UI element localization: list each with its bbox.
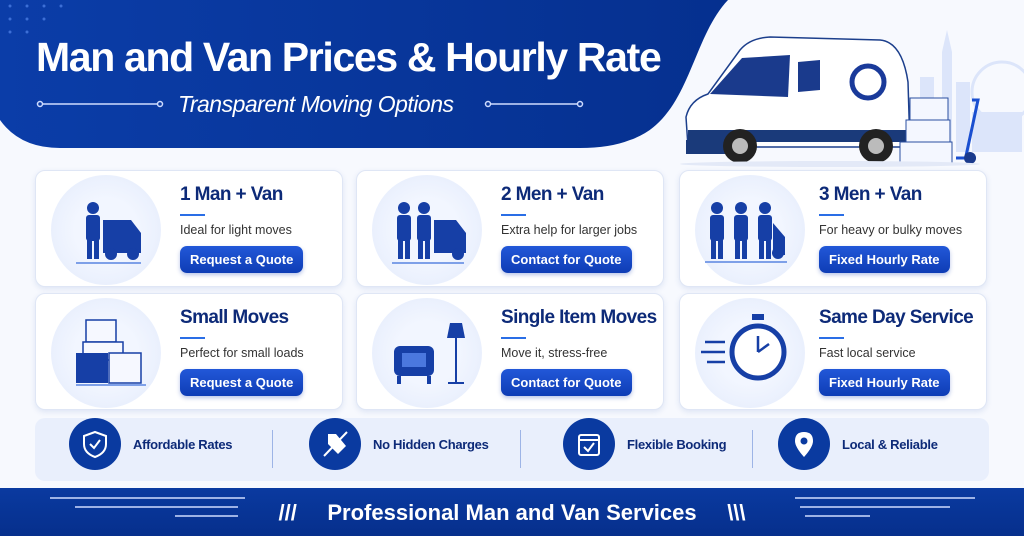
card: Single Item Moves: Single Item Moves	[501, 307, 657, 328]
card: Same Day Service: Same Day Service	[819, 307, 973, 328]
card: Single Item Moves: Move it, stress-free	[501, 346, 607, 360]
card: 1 Man + Van	[35, 170, 343, 287]
card: Small Moves	[35, 293, 343, 410]
feature: No Hidden Charges: No Hidden Charges	[373, 436, 489, 452]
card: Same Day Service: Fast local service	[819, 346, 916, 360]
subtitle: Transparent Moving Options	[178, 91, 454, 117]
header banner	[0, 0, 728, 148]
card: Same Day Service: Fixed Hourly Rate	[829, 375, 940, 390]
card: 3 Men + Van	[679, 170, 987, 287]
card: 3 Men + Van: Fixed Hourly Rate	[829, 252, 940, 267]
feature: Local & Reliable: Local & Reliable	[842, 436, 938, 452]
feature: No Hidden Charges	[309, 418, 489, 470]
card: 1 Man + Van: 1 Man + Van	[180, 184, 283, 205]
card: 2 Men + Van	[356, 170, 664, 287]
feature: Local & Reliable	[778, 418, 938, 470]
card: Single Item Moves	[356, 293, 664, 410]
card: Small Moves: Perfect for small loads	[180, 346, 304, 360]
card: Small Moves: Request a Quote	[190, 375, 293, 390]
footer banner	[0, 488, 1024, 536]
feature: Affordable Rates	[69, 418, 232, 470]
footer text: /// Professional Man and Van Services \\\	[278, 500, 746, 525]
card: 1 Man + Van: Ideal for light moves	[180, 223, 292, 237]
feature: Flexible Booking: Flexible Booking	[627, 436, 726, 452]
card: 2 Men + Van: Extra help for larger jobs	[501, 223, 637, 237]
illustration: van with boxes and skyline	[680, 30, 1024, 167]
card: 2 Men + Van: Contact for Quote	[511, 252, 622, 267]
feature: Affordable Rates: Affordable Rates	[133, 436, 232, 452]
subtitle	[36, 91, 584, 117]
card: Single Item Moves: Contact for Quote	[511, 375, 622, 390]
card: Same Day Service	[679, 293, 987, 410]
features bar	[35, 418, 989, 481]
card: 3 Men + Van: 3 Men + Van	[819, 184, 922, 205]
card: Small Moves: Small Moves	[180, 307, 289, 328]
card: 3 Men + Van: For heavy or bulky moves	[819, 223, 962, 237]
title: Man and Van Prices & Hourly Rate	[36, 34, 660, 80]
card: 1 Man + Van: Request a Quote	[190, 252, 293, 267]
feature: Flexible Booking	[563, 418, 726, 470]
card: 2 Men + Van: 2 Men + Van	[501, 184, 604, 205]
